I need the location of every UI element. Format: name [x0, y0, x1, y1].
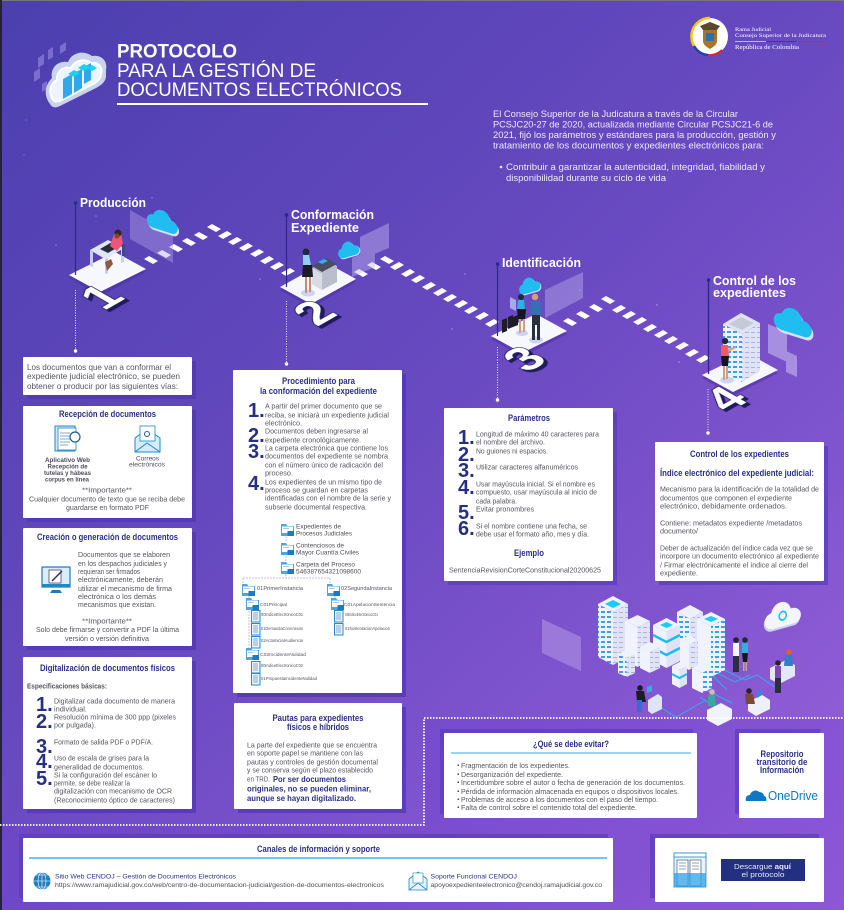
panel: introducción producción: expediente judicial electrónico, se pueden [27, 372, 180, 381]
numbered list [36, 694, 176, 804]
faint panel [542, 619, 581, 671]
text: documento/ [660, 526, 699, 536]
two people and binders [502, 294, 543, 344]
folder tree: Expedientes de [296, 524, 341, 530]
numbered list: el nombre del archivo. [476, 438, 545, 446]
heading: Control de los expedientes [690, 449, 789, 459]
text: utilizar el mecanismo de firma [78, 584, 173, 593]
panel: recepción de documentos [23, 406, 196, 522]
person at desk [90, 230, 125, 274]
title: DOCUMENTOS ELECTRÓNICOS [117, 78, 402, 101]
intro text: El Consejo Superior de la Judicatura a través de la Circular [493, 109, 738, 119]
numbered list: 1. [458, 427, 475, 449]
standing people [732, 637, 752, 674]
illustration: data center [542, 596, 801, 726]
folder tree [242, 524, 396, 685]
text [78, 550, 173, 609]
logo: Rama Judicial [691, 18, 827, 55]
button: el protocolo [742, 870, 784, 879]
numbered list: La carpeta electrónica que contiene los [265, 444, 388, 452]
text: requieran ser firmados [78, 567, 140, 576]
numbered list: debe usar el formato año, mes y día. [476, 530, 589, 538]
intro text: disponibilidad durante su ciclo de vida [506, 173, 666, 183]
sparkles [23, 119, 680, 363]
text: Mecanismo para la identificación de la totalidad de [660, 484, 819, 494]
text [247, 740, 378, 803]
numbered list: con el número único de radicación del [265, 460, 383, 470]
numbered list: expediente cronológicamente. [265, 436, 361, 444]
note [36, 616, 180, 643]
numbered list: Si el nombre contiene una fecha, se [476, 522, 587, 530]
text: en TRD. [247, 774, 270, 784]
heading: Repositorio [760, 749, 804, 759]
dotted connector [706, 389, 710, 435]
floating panels [352, 223, 389, 277]
folder tree: Mayor Cuantía Civiles [296, 550, 360, 556]
intro text: PCSJC20-27 de 2020, actualizada mediante Circular PCSJC21-6 de [493, 120, 773, 130]
text: en soporte papel se mantiene con las [247, 748, 363, 758]
note: versión o versión definitiva [65, 634, 150, 643]
panel: qué se debe evitar [440, 729, 697, 818]
intro text: tratamiento de los documentos y expedientes electrónicos para: [493, 140, 764, 150]
numbered list: A partir del primer documento que se [265, 402, 382, 410]
icon: signing monitor [42, 567, 70, 593]
panel: control de los expedientes [655, 442, 828, 585]
panel: procedimiento [233, 370, 406, 697]
list [458, 761, 685, 812]
leader line [74, 201, 77, 275]
intro text: Contribuir a garantizar la autenticidad, integridad, fiabilidad y [506, 162, 766, 172]
numbered list: Uso de escala de grises para la [54, 754, 150, 762]
label: correos: electrónicos [129, 462, 166, 468]
number 2: 2 [281, 293, 348, 332]
folder tree: C02IncidenteNulidad [260, 652, 307, 657]
text: pautas y controles de gestión documental [247, 758, 378, 766]
numbered list: documentos del expediente se nombra [265, 452, 389, 460]
dotted connector [74, 290, 77, 353]
heading: Producción [80, 196, 146, 210]
intro text [493, 109, 777, 183]
folder tree: 00IndiceElectronicoC02 [261, 663, 304, 668]
intro text: 2021, fijó los parámetros y estándares para la producción, gestión y [493, 130, 777, 140]
numbered list: 3. [248, 441, 265, 463]
step 4: Control de los expedientes [692, 274, 815, 435]
numbered list: proceso se guardan en carpetas [265, 486, 368, 494]
stepping path [144, 224, 710, 363]
number 4: 4 [692, 379, 759, 418]
note: **Importante** [82, 616, 132, 626]
leader line [496, 262, 499, 336]
website link: https://www.ramajudicial.gov.co/web/centro-de-documentacion-judicial/gestion-de-documentos-electronicos [55, 882, 385, 889]
panel: creación o generación [23, 528, 196, 650]
logo: Rama Judicial: República de Colombia [735, 45, 799, 51]
numbered list: 2. [458, 444, 475, 466]
folder tree: 00IndiceElectronicoC01 [345, 612, 378, 617]
heading: expedientes [713, 286, 786, 300]
text: Deber de actualización del índice cada vez que se [660, 544, 813, 552]
dotted connector [285, 301, 288, 366]
cloud icon [518, 274, 542, 297]
numbered list: Resolución mínima de 300 ppp (pixeles [54, 712, 176, 722]
subheading: Índice electrónico del expediente judicial: [660, 468, 814, 478]
list: Falta de control sobre el contenido total del expediente. [461, 803, 637, 812]
panel: introducción producción: Los documentos que van a conformar el [27, 363, 171, 372]
text: documentos que componen el expediente [660, 494, 792, 502]
heading: físicos e híbridos [287, 722, 349, 732]
support contact: Soporte Funcional CENDOJ [430, 874, 517, 880]
button [721, 859, 805, 881]
numbered list: 1. [248, 400, 265, 422]
step 2: Conformación Expediente [280, 208, 389, 366]
label: aplicativo web: corpus en línea [45, 476, 89, 484]
leader line [707, 278, 710, 374]
text: electrónico, debidamente ordenados. [660, 502, 787, 510]
support contact [430, 874, 602, 889]
folder tree: 02SegundaInstancia [341, 586, 392, 592]
icon: email [135, 426, 160, 452]
leader line [285, 213, 288, 287]
note: Cualquier documento de texto que se reciba debe [29, 494, 185, 504]
numbered list: permite, se debe realizar la [54, 778, 131, 788]
numbered list: 4. [248, 473, 265, 495]
folder tree: 01DemandaConAnexos [261, 626, 303, 631]
numbered list: cada palabra. [476, 496, 517, 506]
list: Incertidumbre sobre el autor o fecha de generación de los documentos. [461, 778, 685, 787]
title icon: data cloud [34, 42, 106, 107]
numbered list: subserie documental respectiva. [265, 502, 367, 512]
text: Documentos que se elaboren [78, 550, 170, 559]
text: electrónica o los demás [78, 592, 156, 601]
numbered list: 4. [458, 477, 475, 499]
numbered list: Formato de salida PDF o PDF/A. [54, 738, 153, 746]
numbered list: 3. [458, 460, 475, 482]
copier and person [301, 248, 337, 296]
icon: globe [34, 872, 50, 890]
panel: introducción producción: obtener o producir por las siguientes vías: [27, 382, 178, 391]
floating panel [130, 210, 173, 263]
title [117, 40, 428, 105]
label: aplicativo web: Recepción de [48, 464, 88, 470]
number 1: 1 [68, 277, 135, 316]
heading: transitorio de [756, 757, 808, 767]
numbered list: 5. [458, 502, 475, 524]
folder tree: 546387654321098600 [296, 568, 361, 576]
label: aplicativo web [44, 457, 91, 484]
heading: Parámetros [508, 413, 550, 423]
numbered list: 1. [36, 694, 53, 716]
numbered list: Utilizar caracteres alfanuméricos [476, 462, 578, 472]
numbered list [458, 427, 600, 540]
numbered list: Evitar pronombres [476, 504, 534, 514]
label: aplicativo web: tutelas y hábeas [44, 470, 91, 477]
heading: la conformación del expediente [260, 386, 377, 396]
text: La parte del expediente que se encuentra [247, 740, 378, 750]
folder tree: 01PropuestaIncidenteNulidad [261, 676, 318, 681]
numbered list: 2. [248, 425, 265, 447]
text: expediente. [660, 568, 698, 578]
folder tree: Procesos Judiciales [296, 530, 353, 538]
note [29, 486, 185, 512]
label: correos [129, 456, 166, 468]
icon: protocol document [674, 853, 706, 887]
subheading: Especificaciones básicas: [27, 682, 107, 690]
icon: document [55, 426, 80, 451]
logo: Rama Judicial: Rama Judicial [735, 27, 771, 33]
numbered list: digitalización con mecanismo de OCR [54, 786, 172, 796]
text: incorpore un documento electrónico al expediente [660, 552, 819, 560]
heading [260, 376, 377, 396]
cloud [763, 597, 801, 634]
icon: email [409, 872, 427, 890]
numbered list: (Reconocimiento óptico de caracteres) [54, 796, 175, 804]
note: guardarse en formato PDF [66, 503, 149, 512]
rule [29, 857, 607, 859]
example value: SentenciaRevisionCorteConstitucional20200625 [449, 566, 601, 574]
heading: Expediente [291, 221, 359, 235]
list: Desorganización del expediente. [461, 770, 563, 779]
numbered list: reciba, se iniciará un expediente judicial [265, 410, 389, 420]
text: en los despachos judiciales y [78, 559, 167, 568]
heading: Recepción de documentos [59, 409, 156, 419]
dotted frame [0, 718, 844, 825]
folder tree: C01ApelacionSentencia [344, 602, 396, 607]
numbered list: electrónico. [265, 418, 302, 428]
numbered list: Longitud de máximo 40 caracteres para [476, 430, 600, 438]
heading: ¿Qué se debe evitar? [533, 739, 609, 749]
numbered list: 5. [36, 768, 53, 790]
list: Problemas de acceso a los documentos con el paso del tiempo. [461, 795, 658, 804]
heading: Procedimiento para [282, 376, 355, 386]
note: Solo debe firmarse y convertir a PDF la última [36, 625, 180, 634]
rule [451, 752, 691, 754]
platform [280, 266, 356, 308]
text: originales, no se pueden eliminar, [247, 784, 371, 794]
numbered list: 2. [36, 711, 53, 733]
numbered list [248, 400, 391, 512]
cloud icon [146, 206, 180, 238]
folder tree: 01PrimerInstancia [257, 586, 303, 592]
panel: parámetros [444, 408, 617, 585]
folder tree: Contenciosos de [296, 542, 344, 550]
heading [756, 749, 808, 775]
server and person [720, 313, 760, 384]
heading: Pautas para expedientes [272, 713, 364, 723]
dotted connector [496, 347, 499, 402]
text: electrónicamente, deberán [78, 575, 163, 584]
desk workers [636, 649, 795, 726]
title: PROTOCOLO [117, 40, 237, 62]
numbered list: 6. [458, 518, 475, 540]
panel: pautas [234, 703, 406, 813]
step 3: Identificación [491, 256, 583, 402]
platform [702, 357, 778, 396]
heading: Creación o generación de documentos [37, 532, 178, 542]
server towers [598, 596, 725, 693]
folder tree: Carpeta del Proceso [296, 562, 355, 568]
step 1: Producción [68, 196, 180, 353]
numbered list: proceso. [265, 468, 293, 478]
folder tree: 01SustentacionApelacion [345, 626, 391, 631]
text: aunque se hayan digitalizado. [247, 794, 356, 803]
heading [291, 208, 374, 235]
button: Descargue aquí [734, 862, 792, 871]
title: PARA LA GESTIÓN DE [117, 59, 316, 82]
heading: Canales de información y soporte [257, 844, 380, 854]
label: correos: Correos [136, 456, 160, 462]
numbered list: Los expedientes de un mismo tipo de [265, 478, 382, 486]
text: / Firmar electrónicamente el índice al cierre del [660, 560, 808, 570]
floating panels [768, 324, 797, 377]
heading [272, 713, 364, 732]
cloud icon [337, 238, 361, 261]
numbered list: Usar mayúscula inicial. Si el nombre es [476, 480, 595, 488]
numbered list: 3. [36, 736, 53, 758]
logo: Rama Judicial: Consejo Superior de la Judicatura [735, 33, 827, 39]
platform [69, 256, 146, 296]
website link [55, 874, 385, 889]
numbered list: identificadas con el nombre de la serie y [265, 494, 391, 502]
panel: canales de información [19, 834, 613, 902]
numbered list: por pulgada). [54, 720, 96, 730]
network lines [660, 668, 775, 717]
numbered list: No guiones ni espacios. [476, 446, 548, 456]
text: Por ser documentos [273, 775, 347, 784]
floating panels [545, 272, 583, 318]
heading [713, 274, 796, 300]
note: **Importante** [82, 486, 132, 494]
example heading: Ejemplo [514, 548, 545, 558]
text: mecanismos que existan. [78, 600, 156, 609]
list: Pérdida de información almacenada en equipos o dispositivos locales. [461, 787, 679, 796]
folder tree: C01Principal [260, 602, 287, 607]
panel: repositorio [735, 729, 824, 818]
support contact: apoyoexpedienteelectronico@cendoj.ramajudicial.gov.co [430, 882, 602, 889]
panel: introducción producción [23, 357, 196, 399]
numbered list: compuesto, usar mayúscula al inicio de [476, 488, 597, 496]
website link: Sitio Web CENDOJ – Gestión de Documentos Electrónicos [55, 874, 237, 880]
heading: Conformación [291, 208, 374, 222]
logo: OneDrive: OneDrive [768, 788, 818, 803]
text [660, 484, 819, 578]
list: Fragmentación de los expedientes. [461, 761, 570, 770]
heading: Identificación [502, 256, 581, 270]
platform [491, 318, 567, 357]
numbered list: Digitalizar cada documento de manera [54, 696, 176, 706]
folder tree: 02ActaInicialAudiencia [261, 638, 304, 643]
number 3: 3 [491, 339, 558, 378]
numbered list: individual. [54, 704, 87, 714]
heading: Control de los [713, 274, 796, 288]
heading: Digitalización de documentos físicos [40, 663, 175, 673]
label: aplicativo web: Aplicativo Web [45, 457, 90, 464]
folder tree: 00IndiceElectronicoC01 [261, 612, 304, 617]
panel: descarga [650, 834, 824, 902]
heading: Información [760, 765, 804, 775]
numbered list: 4. [36, 751, 53, 773]
text: y se conserva según el plazo establecido [247, 766, 373, 774]
cloud icon [773, 303, 815, 342]
panel: digitalización [23, 657, 196, 813]
numbered list: generalidad de documentos. [54, 762, 144, 772]
numbered list: Si la configuración del escáner lo [54, 770, 157, 780]
numbered list: Documentos deben ingresarse al [265, 426, 368, 436]
text: Contiene: metadatos expediente /metadatos [660, 518, 802, 528]
